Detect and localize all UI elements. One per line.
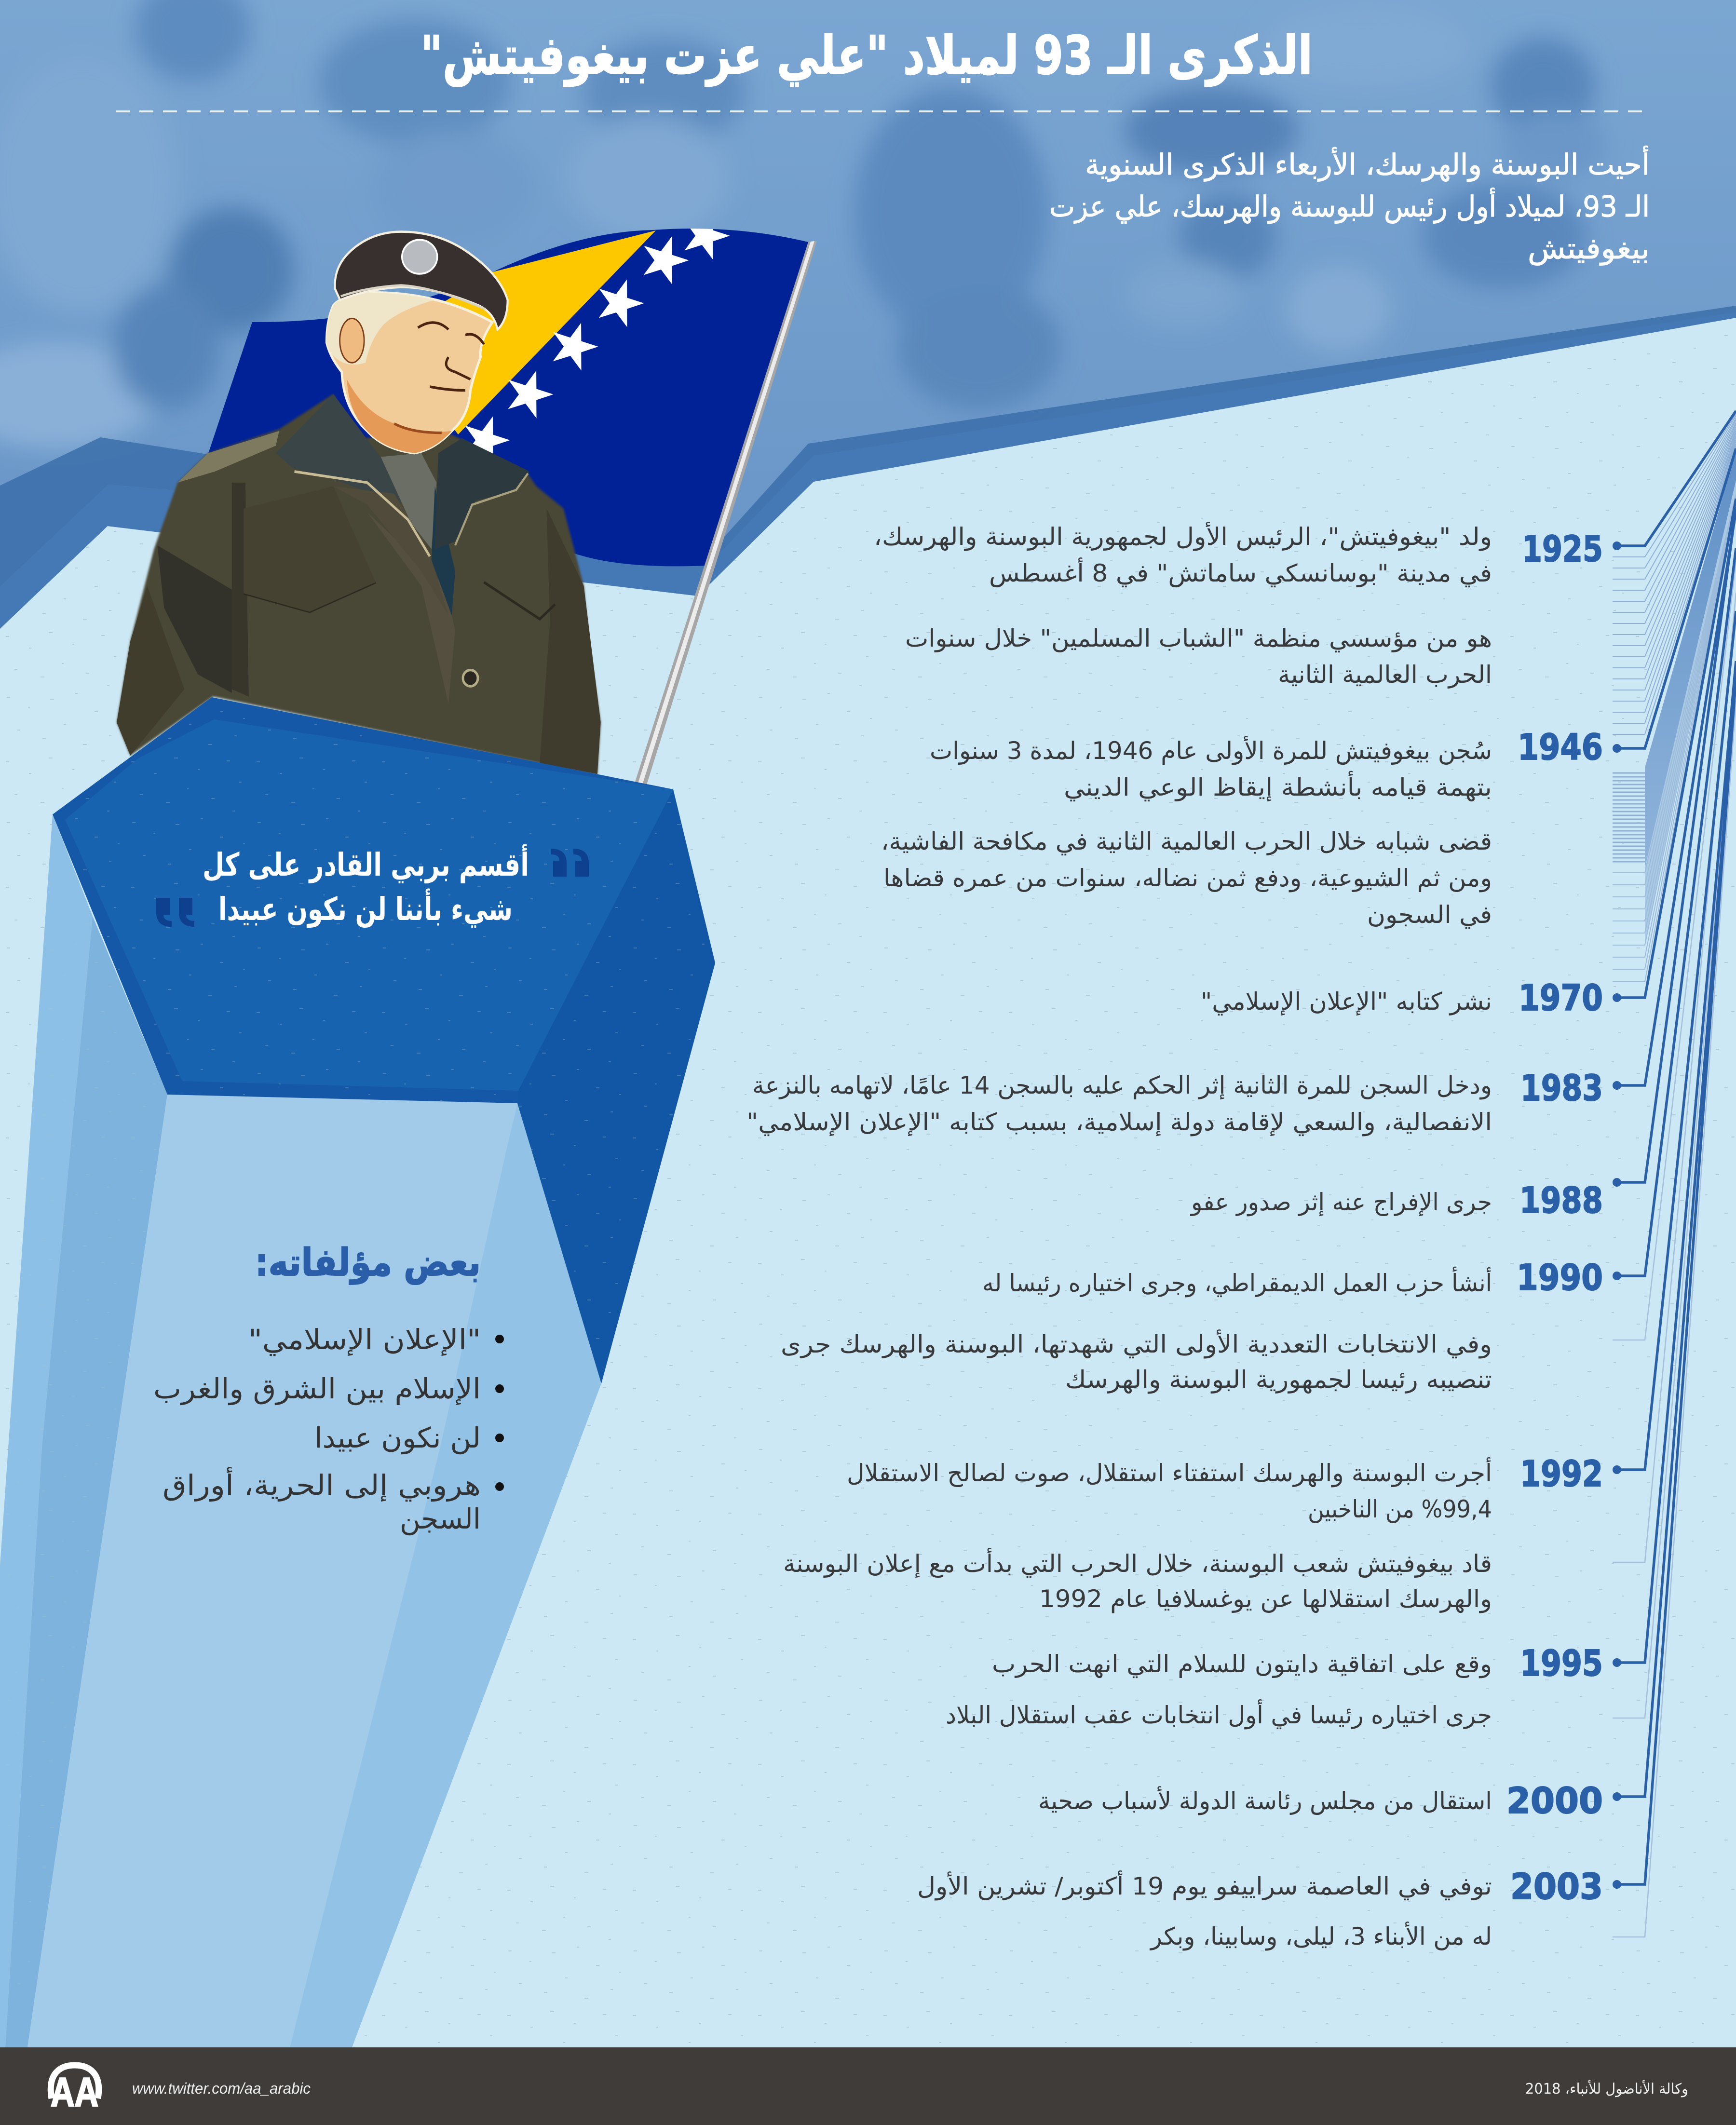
timeline fan graphic bbox=[1613, 411, 1736, 1937]
heading: works: بعض مؤلفاته: bbox=[255, 1241, 481, 1285]
quote text: أقسم بربي القادر على كل bbox=[203, 844, 529, 883]
timeline text: في مدينة "بوسانسكي ساماتش" في 8 أغسطس bbox=[989, 557, 1492, 587]
timeline years: 1995 bbox=[1520, 1643, 1603, 1684]
timeline years: 1970 bbox=[1519, 977, 1603, 1019]
timeline years: 2003 bbox=[1510, 1866, 1603, 1908]
header photo background bbox=[0, 0, 1736, 632]
mid blue band bbox=[0, 312, 1736, 629]
neck shading bbox=[347, 379, 452, 453]
left column bbox=[0, 814, 601, 2047]
collar and shirt bbox=[276, 394, 529, 615]
timeline years: 1946 bbox=[1518, 727, 1603, 768]
title: الذكرى الـ 93 لميلاد "علي عزت بيغوفيتش" bbox=[420, 25, 1313, 87]
footer link: www.twitter.com/aa_arabic bbox=[132, 2080, 311, 2097]
timeline years: 1990 bbox=[1517, 1257, 1603, 1299]
timeline text: هو من مؤسسي منظمة "الشباب المسلمين" خلال سنوات bbox=[905, 624, 1492, 652]
timeline text: ودخل السجن للمرة الثانية إثر الحكم عليه بالسجن 14 عامًا، لاتهامه بالنزعة bbox=[752, 1071, 1492, 1100]
footer bbox=[0, 2047, 1736, 2125]
icon: opening quote bbox=[551, 849, 589, 877]
list of works: "الإعلان الإسلامي" bbox=[248, 1323, 481, 1356]
timeline years: 1992 bbox=[1520, 1453, 1603, 1495]
beret badge bbox=[402, 240, 437, 274]
timeline text: له من الأبناء 3، ليلى، وسابينا، وبكر bbox=[1149, 1922, 1492, 1951]
coat shading bbox=[117, 431, 601, 774]
timeline years: 2000 bbox=[1506, 1780, 1603, 1822]
timeline years: 1925 bbox=[1522, 528, 1603, 570]
beret band bbox=[341, 285, 486, 309]
timeline text: الانفصالية، والسعي لإقامة دولة إسلامية، بسبب كتابه "الإعلان الإسلامي" bbox=[746, 1108, 1492, 1137]
timeline text: %99,4 من الناخبين bbox=[1308, 1495, 1492, 1523]
timeline years: 1983 bbox=[1520, 1068, 1603, 1109]
timeline text: وقع على اتفاقية دايتون للسلام التي انهت الحرب bbox=[992, 1650, 1492, 1678]
timeline years: 1988 bbox=[1519, 1180, 1603, 1221]
list of works: الإسلام بين الشرق والغرب bbox=[153, 1372, 481, 1406]
timeline text: استقال من مجلس رئاسة الدولة لأسباب صحية bbox=[1038, 1786, 1492, 1815]
intro text: أحيت البوسنة والهرسك، الأربعاء الذكرى السنوية bbox=[1085, 146, 1650, 182]
timeline text: ومن ثم الشيوعية، ودفع ثمن نضاله، سنوات من عمره قضاها bbox=[883, 864, 1492, 893]
face bbox=[326, 293, 492, 453]
ear bbox=[340, 318, 364, 363]
dark blue band bbox=[0, 306, 1736, 596]
intro text: الـ 93، لميلاد أول رئيس للبوسنة والهرسك، علي عزت bbox=[1049, 188, 1650, 224]
icon: closing quote bbox=[156, 898, 194, 927]
list of works bbox=[153, 1323, 504, 1536]
timeline text: توفي في العاصمة سراييفو يوم 19 أكتوبر/ تشرين الأول bbox=[917, 1870, 1492, 1901]
eyes nose mouth bbox=[394, 323, 484, 433]
list of works: السجن bbox=[400, 1502, 481, 1536]
intro text: بيغوفيتش bbox=[1528, 232, 1650, 266]
list of works: هروبي إلى الحرية، أوراق bbox=[163, 1467, 481, 1502]
timeline text bbox=[746, 522, 1492, 1951]
beret bbox=[335, 232, 508, 329]
coat bbox=[117, 394, 601, 774]
timeline text: الحرب العالمية الثانية bbox=[1278, 661, 1492, 689]
timeline text: نشر كتابه "الإعلان الإسلامي" bbox=[1201, 988, 1492, 1015]
panel: quote bbox=[0, 697, 715, 2047]
timeline text: والهرسك استقلالها عن يوغسلافيا عام 1992 bbox=[1039, 1585, 1492, 1613]
panel: quote: شيء بأننا لن نكون عبيدا bbox=[218, 888, 513, 928]
icon: AA logo: AA bbox=[51, 2070, 98, 2115]
flag of Bosnia and Herzegovina bbox=[208, 204, 808, 566]
timeline text: قضى شبابه خلال الحرب العالمية الثانية في مكافحة الفاشية، bbox=[881, 827, 1492, 855]
timeline text: تنصيبه رئيسا لجمهورية البوسنة والهرسك bbox=[1065, 1366, 1492, 1394]
timeline years bbox=[1506, 528, 1603, 1908]
timeline text: قاد بيغوفيتش شعب البوسنة، خلال الحرب التي بدأت مع إعلان البوسنة bbox=[783, 1548, 1492, 1578]
portrait of Alija Izetbegovic bbox=[117, 232, 601, 774]
timeline text: أجرت البوسنة والهرسك استفتاء استقلال، صوت لصالح الاستقلال bbox=[847, 1457, 1492, 1488]
timeline text: جرى الإفراج عنه إثر صدور عفو bbox=[1190, 1188, 1492, 1217]
timeline text: في السجون bbox=[1367, 901, 1492, 929]
timeline text: أنشأ حزب العمل الديمقراطي، وجرى اختياره رئيسا له bbox=[982, 1266, 1492, 1298]
hair bbox=[326, 293, 435, 365]
timeline text: بتهمة قيامه بأنشطة إيقاظ الوعي الديني bbox=[1064, 771, 1492, 802]
flag pole bbox=[632, 241, 817, 791]
footer credit: وكالة الأناضول للأنباء، 2018 bbox=[1525, 2079, 1688, 2098]
timeline text: وفي الانتخابات التعددية الأولى التي شهدتها، البوسنة والهرسك جرى bbox=[781, 1329, 1492, 1359]
intro text bbox=[1049, 146, 1650, 266]
timeline text: جرى اختياره رئيسا في أول انتخابات عقب استقلال البلاد bbox=[946, 1699, 1492, 1730]
timeline text: سُجن بيغوفيتش للمرة الأولى عام 1946، لمدة 3 سنوات bbox=[930, 736, 1492, 765]
timeline text: ولد "بيغوفيتش"، الرئيس الأول لجمهورية البوسنة والهرسك، bbox=[874, 522, 1492, 551]
list of works: لن نكون عبيدا bbox=[314, 1421, 481, 1455]
